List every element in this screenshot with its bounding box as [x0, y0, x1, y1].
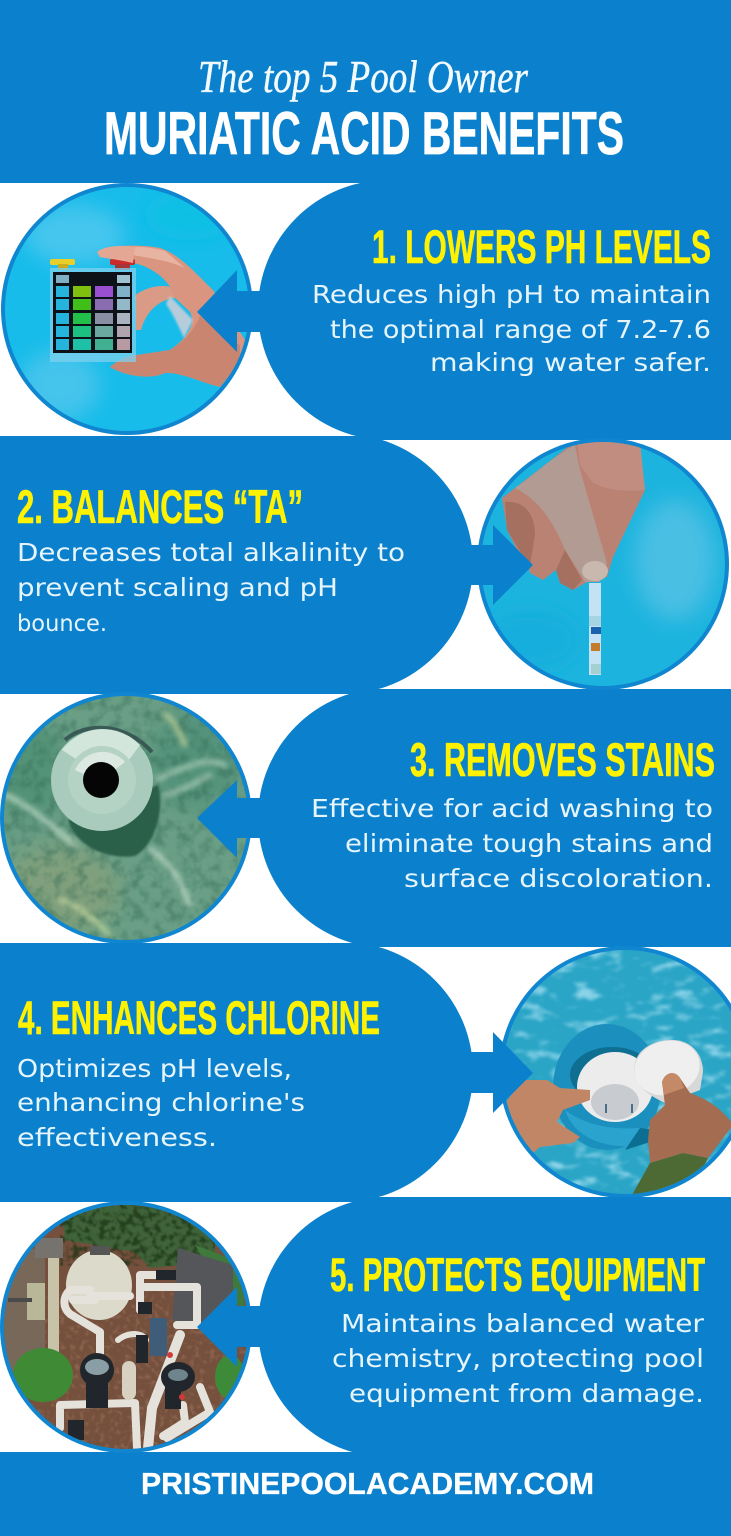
- blue lobe: [258, 1197, 731, 1457]
- fitting shadow: [68, 785, 160, 857]
- description: [332, 1309, 705, 1408]
- chlorine tablet: [634, 1040, 703, 1103]
- description: Maintains balanced water: [341, 1309, 705, 1338]
- blue lobe: [0, 434, 473, 694]
- test strip: [589, 583, 601, 675]
- hand right: [648, 1073, 731, 1163]
- description: bounce.: [17, 611, 107, 637]
- photo: hands loading chlorine floater: [495, 945, 731, 1200]
- heading: 4. ENHANCES CHLORINE: [18, 991, 380, 1044]
- arrow: [460, 1032, 533, 1113]
- description: Decreases total alkalinity to: [17, 538, 405, 567]
- pumps and valves: [68, 1270, 195, 1440]
- test kit: [50, 259, 136, 362]
- sand filter tank: [66, 1250, 132, 1320]
- arrow: [460, 525, 533, 605]
- panel 3: removes stains: [0, 688, 731, 948]
- description: enhancing chlorine's: [17, 1088, 305, 1117]
- description: surface discoloration.: [404, 864, 713, 893]
- heater: [172, 1248, 233, 1328]
- fitting: [51, 729, 153, 831]
- description: [311, 794, 713, 893]
- hand: [97, 246, 245, 387]
- description: prevent scaling and pH: [17, 573, 338, 602]
- floater: [553, 1024, 661, 1150]
- photo: pool equipment pad: [0, 1200, 255, 1455]
- foliage: [60, 1200, 215, 1268]
- footer website: PRISTINEPOOLACADEMY.COM: [141, 1466, 594, 1501]
- arrow: [197, 780, 270, 858]
- wall and post: [4, 1248, 45, 1373]
- sleeve: [632, 1153, 708, 1195]
- hand: [502, 440, 645, 590]
- description: [17, 538, 405, 637]
- heading: 2. BALANCES “TA”: [17, 480, 303, 533]
- description: [312, 280, 711, 377]
- description: eliminate tough stains and: [345, 829, 713, 858]
- description: Optimizes pH levels,: [17, 1054, 292, 1083]
- title: [104, 52, 624, 167]
- arrow: [197, 1287, 270, 1367]
- description: effectiveness.: [17, 1123, 217, 1152]
- description: chemistry, protecting pool: [332, 1344, 704, 1373]
- panel 1: lowers pH levels: [0, 180, 731, 440]
- panel 4: enhances chlorine: [0, 942, 731, 1202]
- panel 2: balances TA: [0, 434, 731, 695]
- description: equipment from damage.: [349, 1379, 704, 1408]
- description: making water safer.: [430, 348, 711, 377]
- blue lobe: [258, 688, 731, 948]
- thumbnail: [582, 561, 608, 581]
- pipes: [60, 1275, 210, 1448]
- blue lobe: [258, 180, 731, 440]
- plants: [13, 1348, 73, 1402]
- panel 5: protects equipment: [0, 1197, 731, 1457]
- photo: pool wall return fitting: [0, 690, 255, 945]
- title: The top 5 Pool Owner: [198, 52, 528, 102]
- hand left: [505, 1080, 590, 1153]
- photo: pH test kit held in hand: [0, 180, 260, 440]
- description: [17, 1054, 305, 1152]
- photo: test strip in hand: [470, 435, 731, 695]
- description: Reduces high pH to maintain: [312, 280, 711, 309]
- description: the optimal range of 7.2-7.6: [330, 315, 711, 344]
- blue lobe: [0, 942, 473, 1202]
- description: Effective for acid washing to: [311, 794, 713, 823]
- arrow: [197, 270, 270, 352]
